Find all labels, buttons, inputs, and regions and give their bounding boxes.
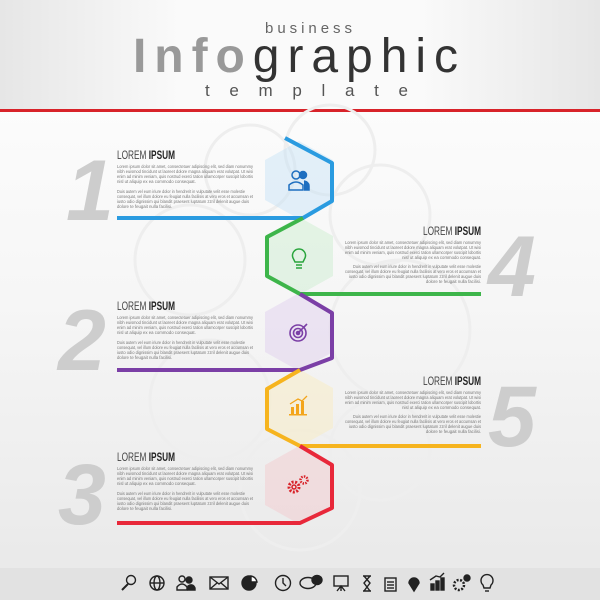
title: business: business	[265, 20, 352, 37]
icon: pin	[409, 578, 419, 591]
text block 2: enim ad minim veniam, quis nostrud exerci tation ullamcorper suscipit lobortis	[117, 325, 253, 330]
text block 5: dolore te feugait nulla facilisi.	[426, 429, 481, 434]
text block 3: enim ad minim veniam, quis nostrud exerci tation ullamcorper suscipit lobortis	[117, 476, 253, 481]
icon: chat	[300, 576, 322, 588]
header band	[0, 0, 600, 109]
text block 5: consequat, vel illum dolore eu feugiat nulla facilisis at vero eros et accumsan et	[345, 419, 482, 424]
text block 5	[345, 376, 482, 434]
text block 4: LOREM IPSUM	[423, 226, 481, 238]
text block 3: consequat, vel illum dolore eu feugiat nulla facilisis at vero eros et accumsan et	[117, 496, 254, 501]
hexagon chain	[117, 138, 481, 524]
big numbers: 2	[56, 293, 106, 389]
icon: people	[289, 171, 309, 190]
text block 4: enim ad minim veniam, quis nostrud exerci tation ullamcorper suscipit lobortis	[345, 250, 481, 255]
text block 2: iusto odio dignissim qui blandit praesent luptatum zzril delenit augue duis	[117, 350, 249, 355]
text block 3: Lorem ipsum dolor sit amet, consectetuer adipiscing elit, sed diam nonummy	[117, 466, 254, 471]
icon: search	[122, 576, 136, 590]
text block 4: nisl ut aliquip ex ea commodo consequat.	[402, 255, 481, 260]
text block 2: Duis autem vel eum iriure dolor in hendrerit in vulputate velit esse molestie	[117, 340, 246, 345]
text block 2: consequat, vel illum dolore eu feugiat nulla facilisis at vero eros et accumsan et	[117, 345, 254, 350]
text block 2: Lorem ipsum dolor sit amet, consectetuer adipiscing elit, sed diam nonummy	[117, 315, 254, 320]
big numbers: 3	[58, 447, 106, 543]
text block 2: nibh euismod tincidunt ut laoreet dolore magna aliquam erat volutpat. Ut wisi	[117, 320, 253, 325]
text block 3: Duis autem vel eum iriure dolor in hendrerit in vulputate velit esse molestie	[117, 491, 246, 496]
text block 1: enim ad minim veniam, quis nostrud exerci tation ullamcorper suscipit lobortis	[117, 174, 253, 179]
text block 1: dolore te feugait nulla facilisi.	[117, 204, 172, 209]
text block 4: Lorem ipsum dolor sit amet, consectetuer adipiscing elit, sed diam nonummy	[345, 240, 482, 245]
big numbers: 1	[66, 143, 114, 239]
text block 5: LOREM IPSUM	[423, 376, 481, 388]
big numbers	[56, 143, 537, 543]
text block 1: nibh euismod tincidunt ut laoreet dolore magna aliquam erat volutpat. Ut wisi	[117, 169, 253, 174]
icon: target	[290, 324, 307, 341]
text block 5: iusto odio dignissim qui blandit praesent luptatum zzril delenit augue duis	[349, 424, 481, 429]
text block 3: nibh euismod tincidunt ut laoreet dolore magna aliquam erat volutpat. Ut wisi	[117, 471, 253, 476]
green	[267, 218, 481, 294]
text block 3	[117, 452, 254, 511]
text block 4: nibh euismod tincidunt ut laoreet dolore magna aliquam erat volutpat. Ut wisi	[345, 245, 481, 250]
icon: gears	[289, 476, 308, 492]
text block 4	[345, 226, 482, 284]
text block 2: nisl ut aliquip ex ea commodo consequat.	[117, 330, 196, 335]
text block 1: nisl ut aliquip ex ea commodo consequat.	[117, 179, 196, 184]
text block 4: iusto odio dignissim qui blandit praesent luptatum zzril delenit augue duis	[349, 274, 481, 279]
text block 4: Duis autem vel eum iriure dolor in hendrerit in vulputate velit esse molestie	[353, 264, 482, 269]
icon: pie	[242, 576, 257, 590]
text block 2: dolore te feugait nulla facilisi.	[117, 355, 172, 360]
icon: clipboard	[385, 578, 396, 591]
text block 3: LOREM IPSUM	[117, 452, 175, 464]
icon: clock	[276, 576, 290, 590]
text block 3: dolore te feugait nulla facilisi.	[117, 506, 172, 511]
blue	[117, 138, 332, 218]
purple	[117, 294, 332, 370]
icon: growth chart	[430, 573, 444, 590]
text block 5: Lorem ipsum dolor sit amet, consectetuer adipiscing elit, sed diam nonummy	[345, 390, 482, 395]
hex fills	[265, 141, 333, 524]
text block 3: nisl ut aliquip ex ea commodo consequat.	[117, 481, 196, 486]
text block 4: consequat, vel illum dolore eu feugiat nulla facilisis at vero eros et accumsan et	[345, 269, 482, 274]
text block 4: dolore te feugait nulla facilisi.	[426, 279, 481, 284]
icon: gears	[454, 575, 470, 590]
text block 1: consequat, vel illum dolore eu feugiat nulla facilisis at vero eros et accumsan et	[117, 194, 254, 199]
icon: globe	[150, 576, 164, 590]
icon: users	[177, 576, 195, 590]
title: Infographic: Infographic	[133, 30, 458, 83]
text block 1: Duis autem vel eum iriure dolor in hendrerit in vulputate velit esse molestie	[117, 189, 246, 194]
text block 5: enim ad minim veniam, quis nostrud exerci tation ullamcorper suscipit lobortis	[345, 400, 481, 405]
icon: bulb	[292, 249, 306, 268]
text block 3: iusto odio dignissim qui blandit praesent luptatum zzril delenit augue duis	[117, 501, 249, 506]
text block 2: LOREM IPSUM	[117, 301, 175, 313]
icon: bulb	[481, 575, 493, 591]
text block 1	[117, 150, 254, 209]
big numbers: 4	[486, 219, 536, 315]
icon: mail	[210, 577, 228, 589]
text block 5: nibh euismod tincidunt ut laoreet dolore magna aliquam erat volutpat. Ut wisi	[345, 395, 481, 400]
text block 1: Lorem ipsum dolor sit amet, consectetuer adipiscing elit, sed diam nonummy	[117, 164, 254, 169]
text block 2	[117, 301, 254, 360]
yellow	[267, 370, 481, 446]
icon: chart	[289, 396, 307, 416]
big numbers: 5	[488, 369, 537, 465]
text block 5: Duis autem vel eum iriure dolor in hendrerit in vulputate velit esse molestie	[353, 414, 482, 419]
text block 5: nisl ut aliquip ex ea commodo consequat.	[402, 405, 481, 410]
title: template: template	[205, 81, 408, 100]
bottom icon bar	[0, 568, 600, 600]
text block 1: LOREM IPSUM	[117, 150, 175, 162]
background brain outline	[135, 105, 470, 550]
red	[117, 446, 332, 523]
icon: presentation	[334, 576, 348, 591]
icon: hourglass	[363, 576, 371, 591]
text block 1: iusto odio dignissim qui blandit praesent luptatum zzril delenit augue duis	[117, 199, 249, 204]
